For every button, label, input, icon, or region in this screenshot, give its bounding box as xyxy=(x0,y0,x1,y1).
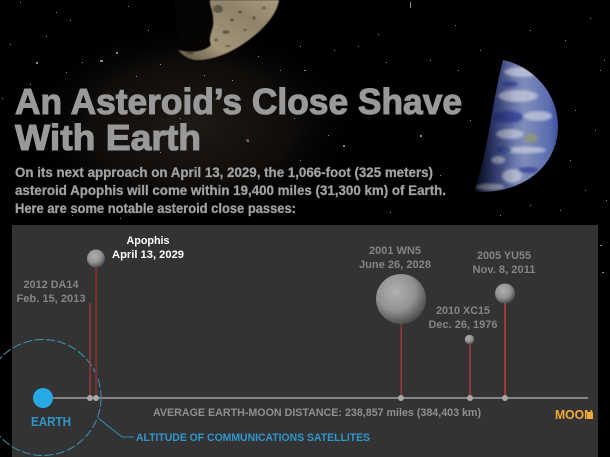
marker: 2005 YU55: 2005 YU55 xyxy=(477,250,531,262)
icon: earth dot xyxy=(33,388,53,408)
title xyxy=(15,81,462,158)
dashed ring: satellite altitude xyxy=(0,340,101,456)
asteroid Apophis photo xyxy=(175,0,279,60)
label: moon: MOON xyxy=(555,407,593,422)
marker: 2010 XC15: 2010 XC15 xyxy=(436,305,490,317)
label: average distance: AVERAGE EARTH-MOON DISTANCE: 238,857 miles (384,403 km) xyxy=(153,407,481,419)
marker: 2005 YU55: Nov. 8, 2011 xyxy=(472,264,536,276)
leader line: satellite altitude xyxy=(98,418,134,437)
marker: 2012 DA14: 2012 DA14 xyxy=(24,279,79,291)
intro text xyxy=(15,165,446,216)
marker: 2001 WN5: 2001 WN5 xyxy=(369,245,421,257)
marker: Apophis xyxy=(87,235,184,401)
marker: Apophis: April 13, 2029 xyxy=(112,249,184,261)
intro text: On its next approach on April 13, 2029, the 1,066-foot (325 meters) xyxy=(15,165,433,180)
marker: 2010 XC15 xyxy=(428,305,498,401)
marker: 2005 YU55 xyxy=(472,250,536,401)
marker: Apophis: Apophis xyxy=(126,235,170,247)
panel: distance chart xyxy=(0,225,598,457)
marker: 2001 WN5: June 26, 2028 xyxy=(359,259,431,271)
marker: 2010 XC15: Dec. 26, 1976 xyxy=(428,319,498,331)
label: earth: EARTH xyxy=(31,414,71,429)
intro text: asteroid Apophis will come within 19,400 miles (31,300 km) of Earth. xyxy=(15,183,446,198)
intro text: Here are some notable asteroid close passes: xyxy=(15,201,296,216)
marker: 2012 DA14: Feb. 15, 2013 xyxy=(16,293,86,305)
marker: 2012 DA14 xyxy=(16,279,93,401)
label: satellite altitude: ALTITUDE OF COMMUNICATIONS SATELLITES xyxy=(136,432,370,444)
earth photo crescent xyxy=(474,55,558,195)
title: With Earth xyxy=(15,117,201,158)
marker: 2001 WN5 xyxy=(359,245,431,401)
baseline: earth-moon distance xyxy=(53,397,588,399)
title: An Asteroid’s Close Shave xyxy=(15,81,462,122)
